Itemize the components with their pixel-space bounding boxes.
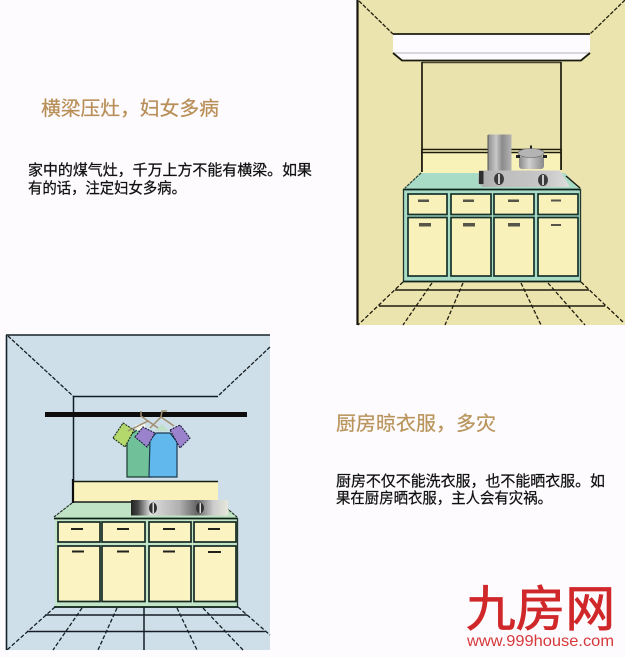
icon: cooking pot: [516, 146, 547, 169]
panel: kitchen with hanging clothes: [6, 335, 270, 650]
back wall: [422, 62, 561, 172]
icon: gas stove top: [131, 500, 228, 516]
floor grid: [7, 607, 270, 650]
cabinet: [54, 518, 238, 607]
back wall lines: [73, 396, 218, 483]
text block: clothes in kitchen: 厨房不仅不能洗衣服，也不能晒衣服。如: [336, 473, 605, 490]
countertop: [403, 173, 581, 189]
ceiling perspective lines: [359, 0, 625, 34]
text block: beam over stove: 有的话，注定妇女多病。: [28, 179, 186, 197]
text block: beam over stove: [28, 162, 312, 197]
icon: gas stove top: [478, 170, 570, 187]
text block: clothes in kitchen: [336, 473, 605, 507]
icon: green shirt on hanger: [113, 411, 158, 477]
cabinet: [403, 189, 581, 282]
ceiling beam: [393, 34, 590, 60]
backsplash: [421, 149, 561, 173]
text block: clothes in kitchen: 果在厨房晒衣服，主人会有灾祸。: [336, 490, 552, 507]
heading: beam over stove: 横梁压灶，妇女多病: [41, 98, 219, 120]
floor grid: [358, 282, 624, 325]
handles: [418, 200, 561, 226]
icon: blue shirt on hanger: [135, 411, 190, 477]
watermark logo: [466, 583, 615, 650]
icon: stove hood pipe: [488, 134, 512, 172]
left wall edge: [356, 0, 359, 325]
logo URL: www.999house.com: [466, 633, 614, 650]
drawers: [408, 194, 578, 214]
countertop: [54, 503, 238, 518]
drawers: [58, 522, 236, 542]
doors: [58, 546, 236, 602]
heading: clothes in kitchen: 厨房晾衣服，多灾: [336, 413, 496, 435]
backsplash: [73, 479, 218, 503]
logo name: 九房网: [466, 583, 615, 637]
text block: beam over stove: 家中的煤气灶，千万上方不能有横梁。如果: [28, 162, 312, 179]
panel: kitchen with beam over stove: [357, 0, 625, 325]
room walls: [7, 335, 270, 650]
room walls: [357, 0, 625, 325]
clothes rail: [45, 412, 247, 417]
doors: [408, 218, 578, 276]
room outline: [6, 335, 270, 650]
ceiling perspective lines: [8, 336, 270, 396]
handles: [71, 528, 221, 553]
